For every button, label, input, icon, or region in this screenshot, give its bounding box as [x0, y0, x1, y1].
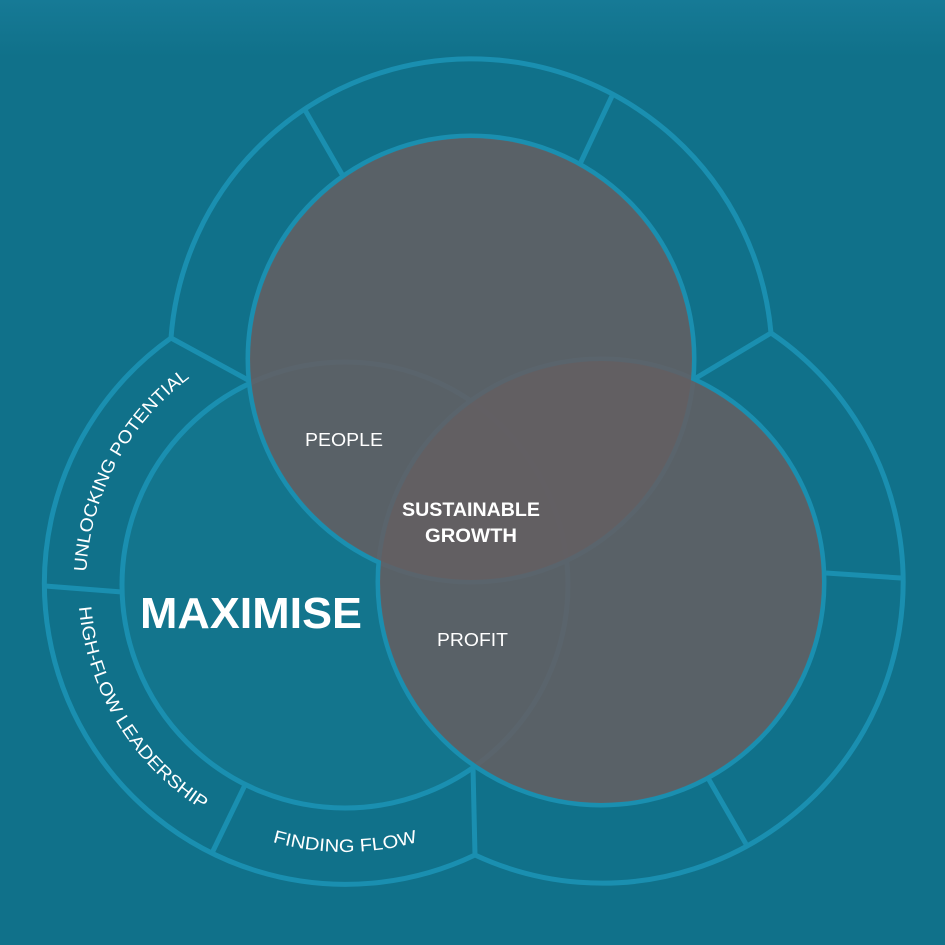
- outer ring outline: [44, 59, 903, 884]
- label: sustainable growth: [402, 500, 540, 547]
- label: sustainable growth: SUSTAINABLE: [402, 500, 540, 521]
- heading: maximise: MAXIMISE: [140, 589, 362, 638]
- label: profit: PROFIT: [437, 630, 508, 650]
- ring label: high-flow leadership: HIGH-FLOW LEADERSHIP: [79, 607, 208, 804]
- ring segment dividers: [45, 96, 901, 855]
- circle: profit fill: [380, 361, 822, 803]
- ring label: finding flow: FINDING FLOW: [274, 830, 415, 852]
- label: people: PEOPLE: [305, 430, 383, 450]
- circle: maximise: [122, 362, 568, 808]
- label: sustainable growth: GROWTH: [425, 526, 517, 547]
- ring label: unlocking potential: UNLOCKING POTENTIAL: [74, 372, 190, 570]
- circle: people fill: [250, 138, 692, 580]
- circle outlines: people and profit: [248, 136, 824, 805]
